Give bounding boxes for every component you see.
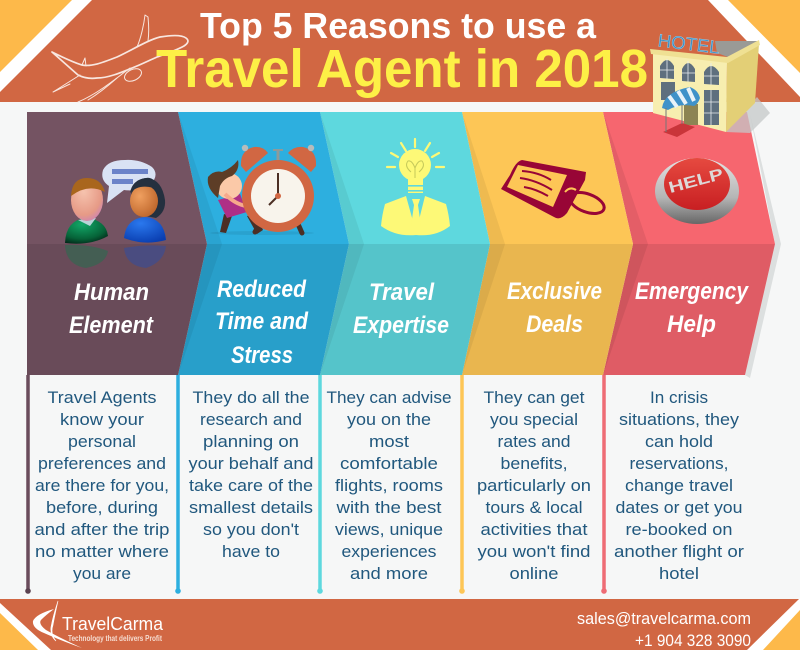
text block: Reduced Time and Stress: so you don't	[203, 521, 299, 539]
heading: Travel Expertise	[353, 279, 449, 339]
text block: Reduced Time and Stress: They do all the	[192, 389, 310, 407]
text block: Emergency Help: situations, they	[619, 411, 740, 429]
text block: Exclusive Deals: you special	[490, 411, 578, 429]
text block: Emergency Help: dates or get you	[616, 499, 742, 517]
panel: Human Element	[27, 112, 207, 375]
text block: Human Element: are there for you,	[35, 477, 169, 495]
heading: Reduced Time and Stress: Stress	[231, 342, 293, 369]
text block: Human Element: you are	[73, 565, 131, 583]
heading: Travel Expertise: Expertise	[353, 312, 449, 339]
text block: Emergency Help: can hold	[645, 433, 713, 451]
text block: Emergency Help: hotel	[659, 565, 699, 583]
icon: hotel building: HOTEL	[657, 30, 721, 58]
text block: Human Element: and after the trip	[34, 521, 170, 539]
contact details	[577, 609, 751, 650]
text block: Reduced Time and Stress	[188, 389, 314, 561]
heading: Emergency Help: Help	[667, 311, 716, 338]
heading: Human Element	[69, 279, 154, 339]
text block: Reduced Time and Stress: smallest details	[189, 499, 313, 517]
logo: TravelCarma: Technology that delivers Profit	[68, 634, 162, 643]
title: Travel Agent in 2018	[156, 39, 648, 99]
text block: Exclusive Deals: rates and	[498, 433, 570, 451]
text block: Human Element	[34, 389, 170, 583]
heading: Emergency Help	[635, 278, 749, 338]
icon: help button	[655, 158, 739, 224]
text block: Reduced Time and Stress: take care of the	[189, 477, 313, 495]
text block: Human Element: preferences and	[38, 455, 166, 473]
text block: Travel Expertise: They can advise	[326, 389, 452, 407]
heading: Human Element: Human	[74, 279, 149, 306]
text block: Travel Expertise: comfortable	[340, 455, 438, 473]
heading: Emergency Help: Emergency	[635, 278, 749, 305]
icon: two people talking	[65, 160, 166, 268]
text block: Travel Expertise	[326, 389, 452, 583]
panel: Travel Expertise	[320, 112, 490, 375]
heading: Reduced Time and Stress: Reduced	[217, 276, 307, 303]
text block: Emergency Help: change travel	[625, 477, 733, 495]
text block: Human Element: before, during	[46, 499, 158, 517]
heading: Exclusive Deals: Deals	[526, 311, 583, 338]
header banner	[0, 0, 800, 102]
text block: Exclusive Deals: particularly on	[477, 477, 591, 495]
text block: Exclusive Deals	[477, 389, 591, 583]
contact details: sales@travelcarma.com	[577, 609, 751, 628]
text block: Reduced Time and Stress: planning on	[203, 433, 299, 451]
text block: Exclusive Deals: tours & local	[486, 499, 582, 517]
text block: Reduced Time and Stress: research and	[200, 411, 302, 429]
icon: help button: HELP	[667, 166, 726, 197]
text block: Travel Expertise: flights, rooms	[335, 477, 443, 495]
text block: Emergency Help: In crisis	[650, 389, 708, 407]
text block: Reduced Time and Stress: your behalf and	[188, 455, 314, 473]
icon: character with alarm clock	[208, 145, 316, 235]
logo: TravelCarma	[33, 601, 164, 648]
text block: Travel Expertise: you on the	[347, 411, 431, 429]
panel: Reduced Time and Stress	[178, 112, 349, 375]
logo: TravelCarma: TravelCarma	[62, 614, 164, 634]
text block: Exclusive Deals: online	[510, 565, 558, 583]
icon: luggage tag	[501, 160, 607, 218]
heading: Reduced Time and Stress: Time and	[215, 308, 309, 335]
text block: Human Element: personal	[68, 433, 136, 451]
text block: Emergency Help: another flight or	[614, 543, 745, 561]
text block: Emergency Help: reservations,	[630, 455, 728, 473]
text block: Travel Expertise: and more	[350, 565, 428, 583]
text block: Human Element: no matter where	[35, 543, 169, 561]
text block: Emergency Help	[614, 389, 745, 583]
text block: Travel Expertise: with the best	[335, 499, 442, 517]
text block: Exclusive Deals: benefits,	[500, 455, 568, 473]
text block: Human Element: Travel Agents	[48, 389, 156, 407]
panel: Exclusive Deals	[462, 112, 633, 375]
text block: Human Element: know your	[60, 411, 145, 429]
text block: Travel Expertise: most	[369, 433, 409, 451]
text block: Reduced Time and Stress: have to	[222, 543, 280, 561]
text block: Exclusive Deals: They can get	[484, 389, 585, 407]
footer banner	[0, 599, 800, 650]
icon: airplane outline	[52, 15, 188, 102]
heading: Exclusive Deals	[507, 278, 602, 338]
text block: Travel Expertise: experiences	[342, 543, 436, 561]
panel: Emergency Help	[603, 112, 775, 375]
text block: Exclusive Deals: you won't find	[478, 543, 590, 561]
contact details: +1 904 328 3090	[635, 631, 751, 650]
heading: Travel Expertise: Travel	[369, 279, 435, 306]
icon: light bulb with suit	[381, 139, 450, 235]
text block: Travel Expertise: views, unique	[335, 521, 443, 539]
text block: Emergency Help: re-booked on	[626, 521, 732, 539]
icon: hotel building	[650, 30, 770, 137]
heading: Reduced Time and Stress	[215, 276, 309, 369]
title	[156, 5, 648, 99]
heading: Exclusive Deals: Exclusive	[507, 278, 602, 305]
heading: Human Element: Element	[69, 312, 154, 339]
timelines	[25, 375, 607, 594]
panel: chevron shadow	[745, 114, 781, 378]
title: Top 5 Reasons to use a	[200, 5, 597, 46]
text block: Exclusive Deals: activities that	[480, 521, 588, 539]
